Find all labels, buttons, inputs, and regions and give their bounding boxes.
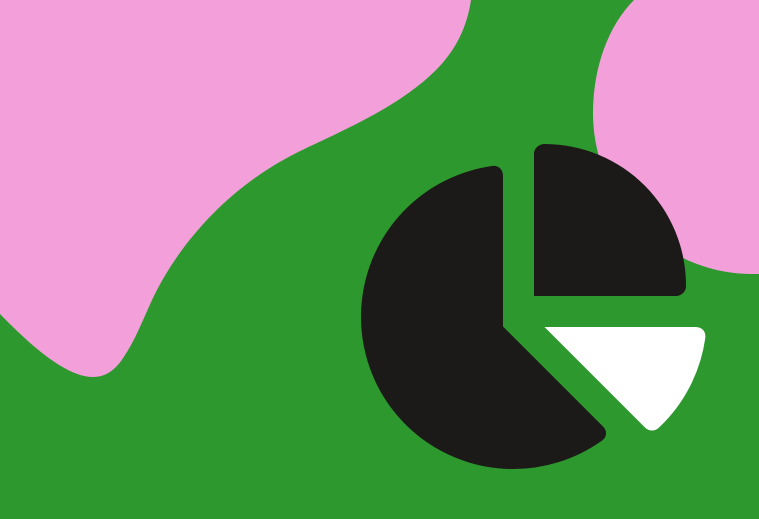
blob: top-right pink (593, 0, 759, 274)
blob: top-left pink (0, 0, 471, 377)
pie slice: white (544, 327, 705, 430)
pie slice: top-right black (534, 144, 686, 296)
pie slice: large black (361, 166, 606, 469)
pie chart icon (361, 144, 705, 469)
